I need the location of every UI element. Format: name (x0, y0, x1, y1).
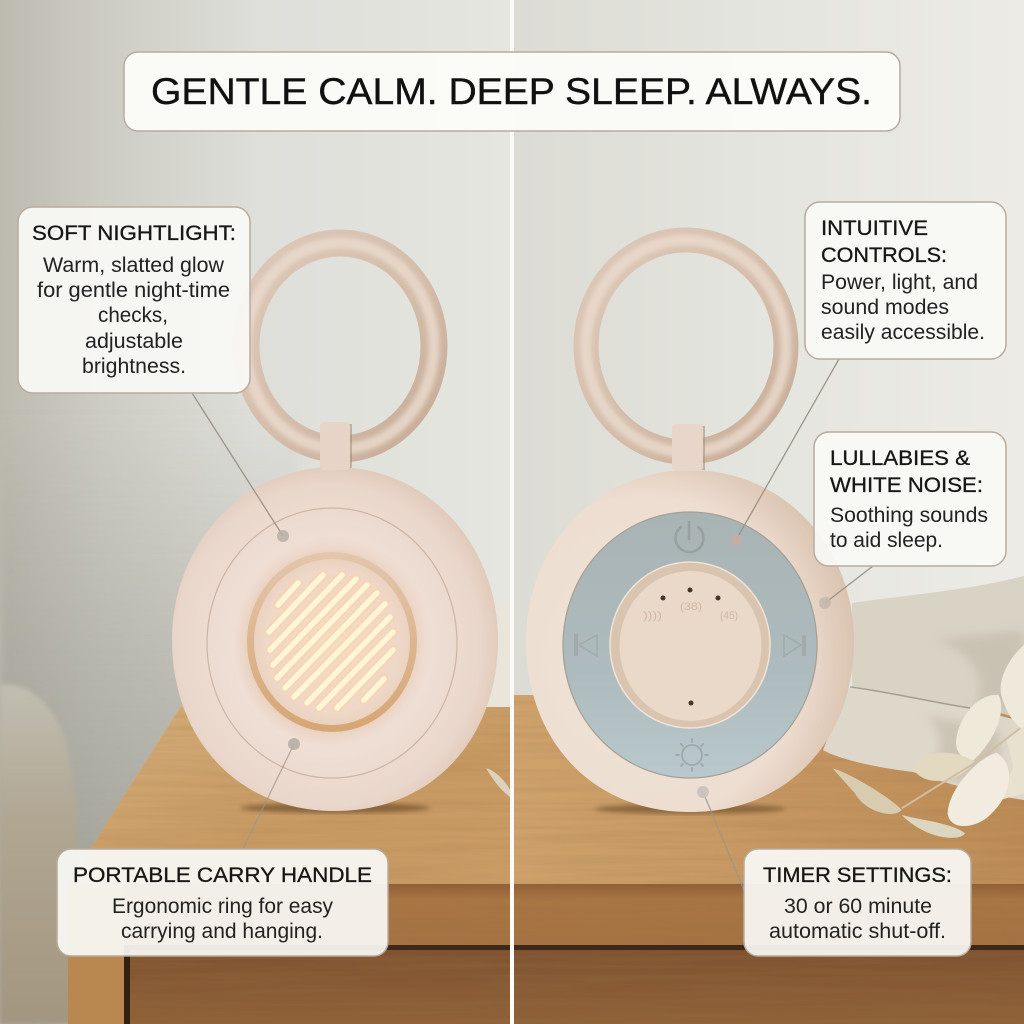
leader line and dot: timer (697, 786, 744, 890)
device body (526, 470, 854, 812)
dried leaf fragment (486, 768, 510, 797)
callout: portable carry handle (57, 849, 388, 956)
indicator dots (660, 588, 720, 706)
heading: PORTABLE CARRY HANDLE (73, 864, 372, 887)
callout: intuitive controls (805, 202, 1006, 359)
leader line and dot: lullabies (819, 566, 873, 609)
heading: SOFT NIGHTLIGHT: (32, 222, 236, 245)
blue control ring (563, 512, 817, 778)
title banner (124, 52, 900, 131)
heading: CONTROLS: (821, 244, 947, 267)
table front edge (296, 884, 510, 945)
description: brightness. (82, 355, 186, 378)
table top (68, 707, 510, 884)
description: carrying and hanging. (121, 920, 323, 943)
icon: next (784, 635, 804, 656)
heading: INTUITIVE (821, 217, 928, 240)
title text: GENTLE CALM. DEEP SLEEP. ALWAYS. (151, 71, 872, 112)
description: adjustable (85, 330, 183, 353)
contact shadow (240, 803, 430, 813)
description (830, 504, 988, 552)
callout: lullabies and white noise (814, 432, 1006, 566)
dial mode marks: (38) (680, 601, 702, 613)
centre dial (620, 571, 762, 721)
wood grain (168, 716, 474, 804)
description (821, 271, 985, 344)
heading: WHITE NOISE: (830, 474, 983, 497)
wall (514, 0, 1024, 695)
description: easily accessible. (821, 321, 985, 344)
body seam (207, 508, 457, 778)
panel: right photo, controls side (514, 0, 1024, 1024)
icon: power (676, 522, 704, 552)
glowing slats (269, 575, 393, 708)
icon: brightness sun (676, 739, 708, 771)
dial mode marks (643, 601, 738, 622)
description: sound modes (821, 296, 949, 319)
dial mode marks: )))) (643, 610, 662, 622)
wall (0, 0, 510, 1024)
carry ring (586, 240, 786, 452)
leader line and dot: soft nightlight (192, 393, 289, 542)
heading (821, 217, 947, 267)
table front edge (514, 884, 1024, 946)
blurred towel behind device (468, 600, 510, 762)
description: Power, light, and (821, 271, 978, 294)
blurred armchair (0, 684, 80, 1024)
description: 30 or 60 minute (784, 895, 932, 918)
table leg (68, 956, 124, 1024)
drawer (514, 945, 1024, 1024)
description: checks, (98, 304, 168, 327)
description: Ergonomic ring for easy (112, 895, 333, 918)
description (37, 254, 230, 378)
folded towels (823, 576, 1024, 800)
dial mode marks: (45) (720, 610, 738, 622)
description (112, 895, 333, 943)
heading: TIMER SETTINGS: (763, 864, 952, 887)
description: Warm, slatted glow (43, 254, 225, 277)
icon: previous (576, 634, 597, 656)
panel: left photo, nightlight side (0, 0, 510, 1024)
description: to aid sleep. (830, 529, 943, 552)
carry ring (246, 243, 434, 449)
wood grain (514, 734, 602, 864)
device body (172, 467, 498, 811)
description (769, 895, 946, 943)
leader line and dot: intuitive controls (730, 359, 839, 546)
speaker nightlight (241, 546, 424, 738)
heading: LULLABIES & (830, 447, 970, 470)
centre divider (510, 0, 514, 1024)
heading (830, 447, 983, 497)
callout: timer settings (744, 849, 971, 956)
description: Soothing sounds (830, 504, 988, 527)
description: automatic shut-off. (769, 920, 946, 943)
drawer (124, 945, 510, 1024)
ring clasp (320, 422, 352, 470)
contact shadow (595, 804, 785, 814)
eucalyptus sprig (833, 645, 1024, 838)
description: for gentle night-time (37, 279, 230, 302)
table top (514, 695, 1024, 884)
callout: soft nightlight (18, 207, 250, 393)
ring clasp (672, 424, 705, 471)
centre hub recess (610, 562, 770, 728)
leader line and dot: carry handle (243, 738, 300, 849)
